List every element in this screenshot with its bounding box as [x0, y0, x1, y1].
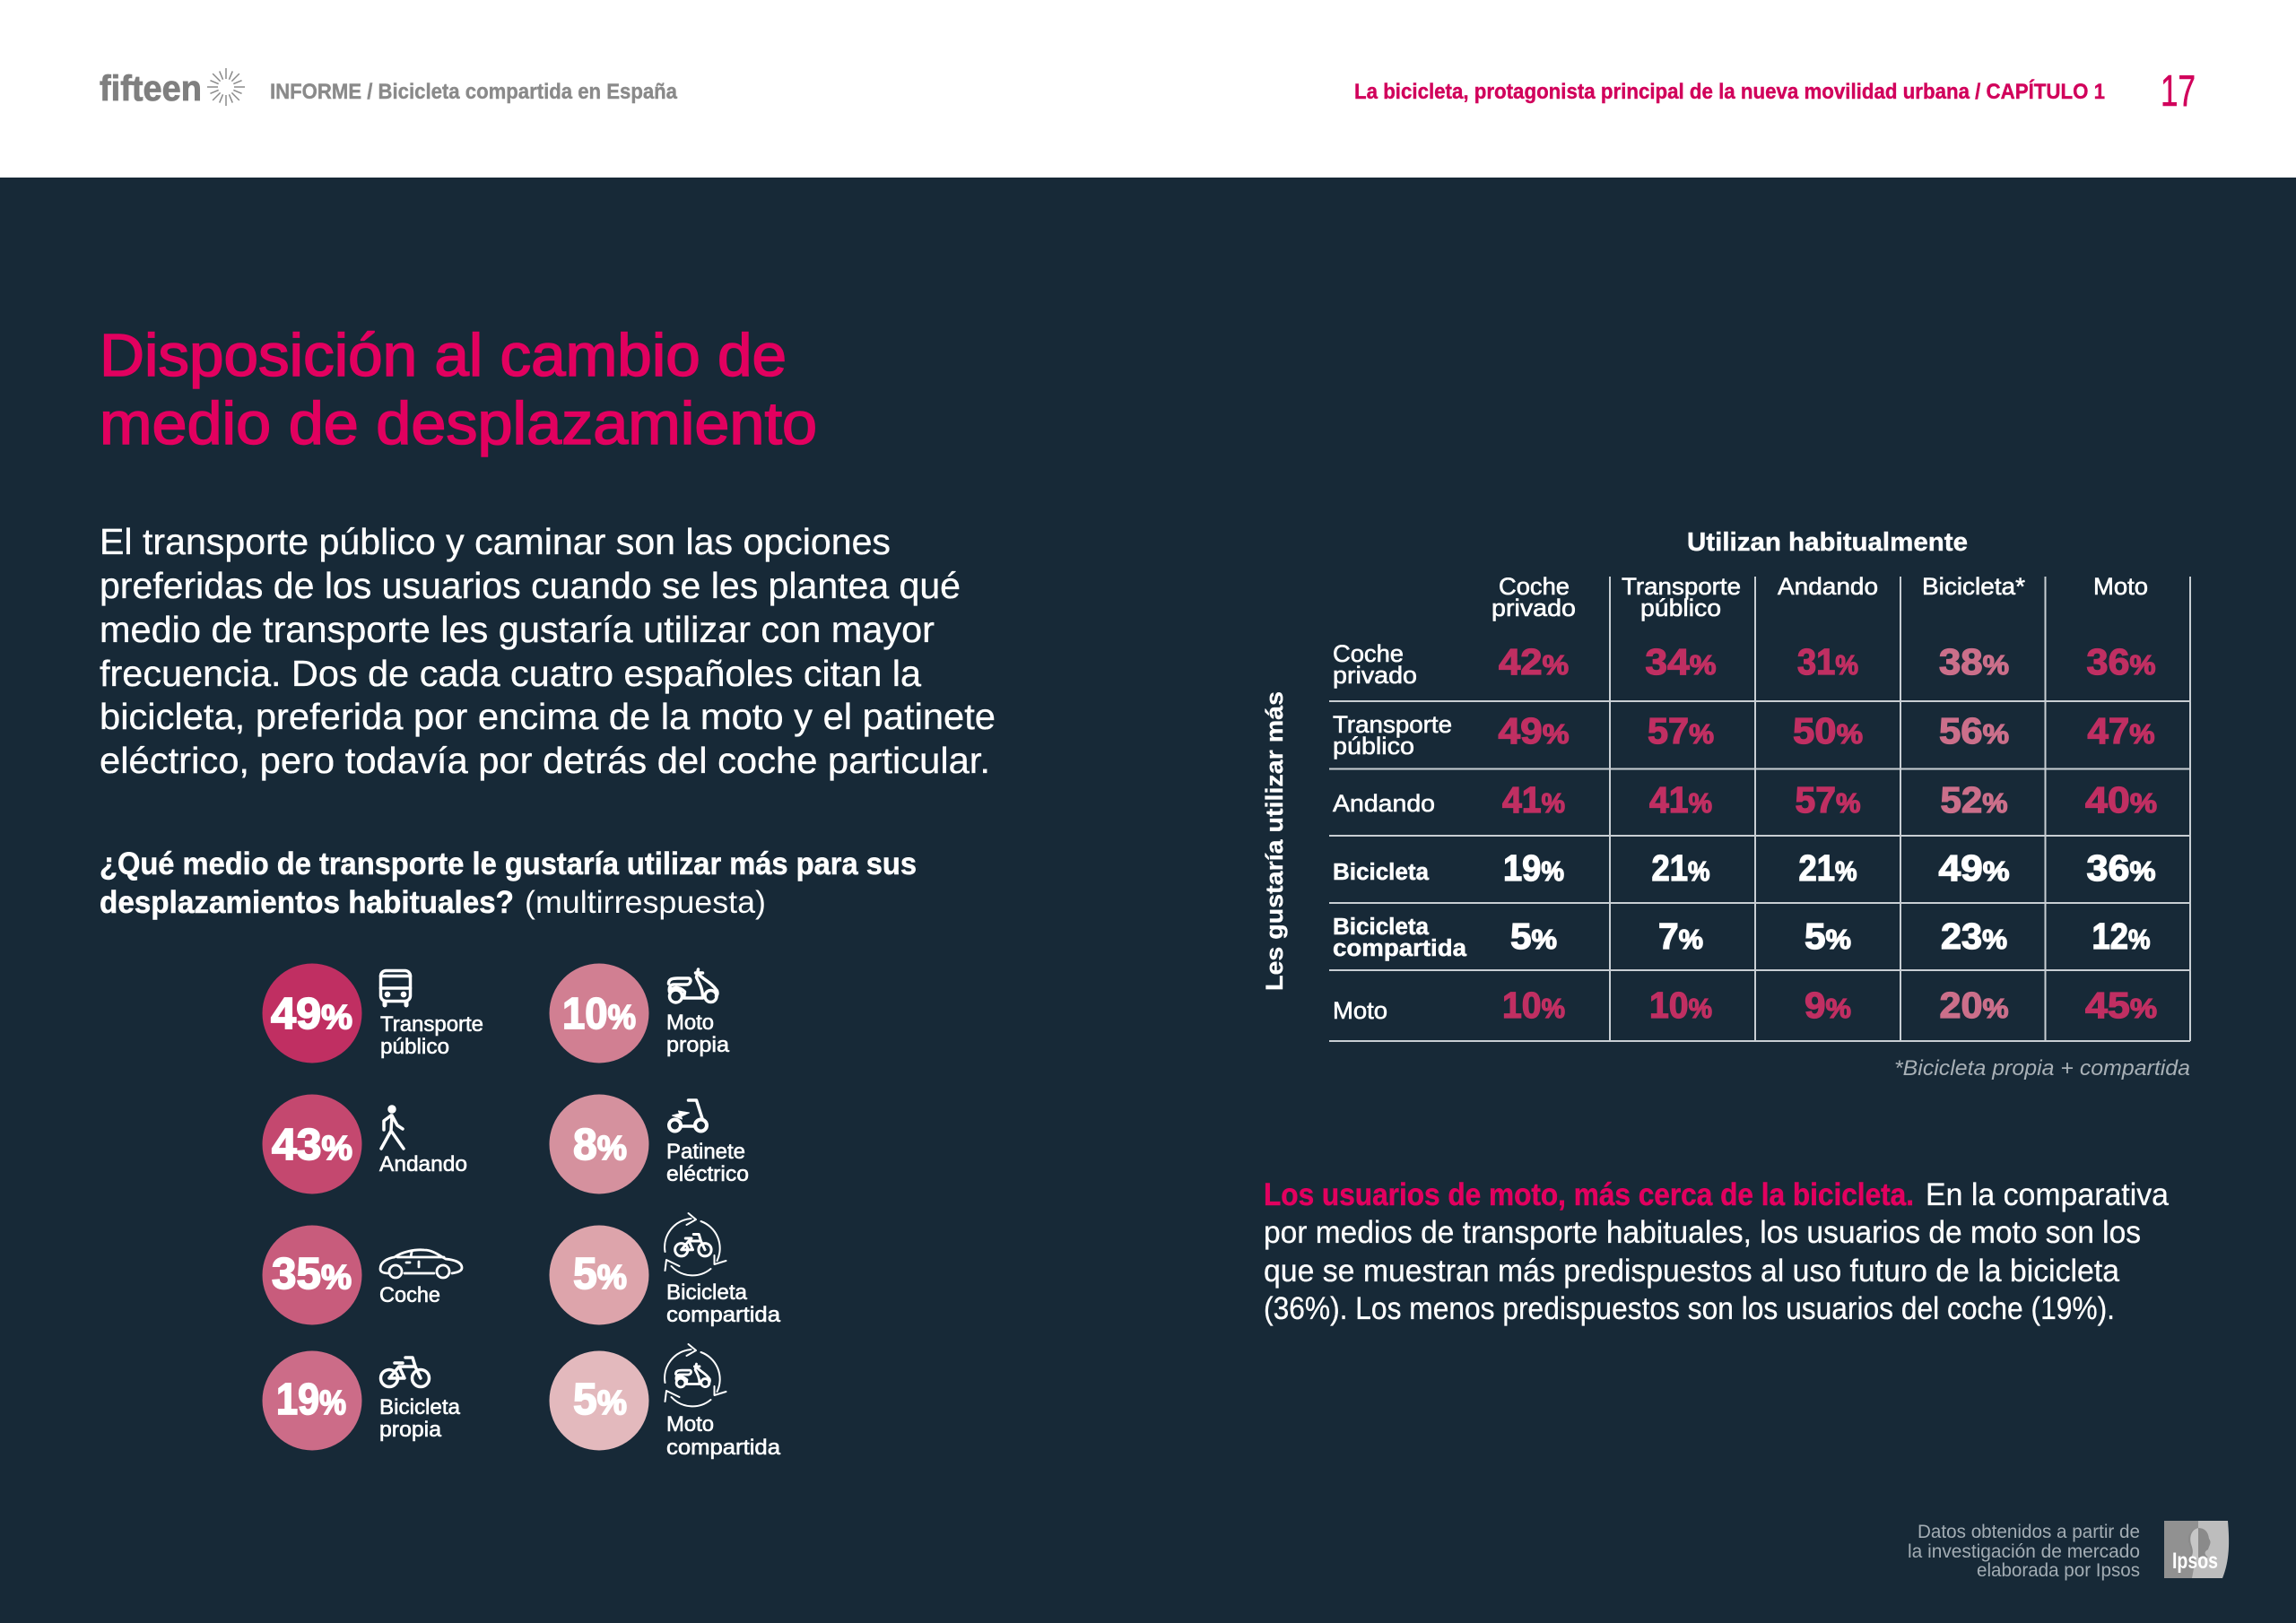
- row: andando: 52%: [1941, 779, 2007, 820]
- stat: bicicleta compartida 5%: compartida: [666, 1303, 781, 1327]
- stat: andando 43%: 43%: [272, 1121, 352, 1169]
- row: transporte público: 50%: [1793, 710, 1863, 751]
- page number: 17: [2161, 67, 2196, 116]
- stat: bicicleta propia 19%: propia: [379, 1418, 442, 1442]
- icon: electric scooter: [669, 1100, 707, 1132]
- stat: coche 35%: [262, 1225, 462, 1325]
- stat: bicicleta propia 19%: 19%: [276, 1376, 346, 1424]
- stat: bicicleta compartida 5%: 5%: [573, 1250, 627, 1298]
- row: coche privado: 34%: [1645, 641, 1717, 682]
- survey question: ¿Qué medio de transporte le gustaría utilizar más para sus: [100, 846, 917, 881]
- stat: moto compartida 5%: compartida: [666, 1436, 781, 1460]
- row: bicicleta: 36%: [2086, 847, 2156, 889]
- row: bicicleta: Bicicleta: [1333, 860, 1430, 885]
- column headers: Transporte: [1622, 573, 1741, 600]
- stat: moto propia 10%: [549, 963, 730, 1063]
- Ipsos logo: [2164, 1521, 2229, 1578]
- row: bicicleta compartida: 7%: [1658, 916, 1703, 957]
- column headers: público: [1640, 595, 1721, 621]
- stat: moto compartida 5%: Moto: [666, 1412, 714, 1436]
- row: bicicleta compartida: 12%: [2092, 916, 2151, 957]
- row: moto: 9%: [1805, 985, 1851, 1026]
- column headers: privado: [1492, 595, 1576, 621]
- row: transporte público: [1333, 710, 2154, 759]
- icon: motorbike: [669, 969, 718, 1002]
- stat: transporte público 49%: [262, 963, 483, 1063]
- source note: Datos obtenidos a partir de: [1918, 1522, 2140, 1542]
- row: bicicleta: 21%: [1652, 847, 1709, 889]
- intro paragraph: El transporte público y caminar son las opciones: [100, 521, 891, 562]
- intro paragraph: bicicleta, preferida por encima de la moto y el patinete: [100, 696, 996, 737]
- stat: moto propia 10%: Moto: [666, 1011, 714, 1035]
- icon: sun burst: [207, 68, 245, 106]
- icon: walking person: [381, 1107, 404, 1149]
- row: andando: 40%: [2085, 779, 2157, 820]
- survey question: [100, 846, 917, 920]
- stat: coche 35%: Coche: [379, 1283, 440, 1307]
- icon: bicycle: [380, 1358, 429, 1386]
- row: bicicleta compartida: compartida: [1333, 936, 1467, 961]
- fifteen logo: fifteen: [100, 69, 202, 108]
- column headers: Moto: [2093, 573, 2148, 600]
- stat: patinete eléctrico 8%: eléctrico: [666, 1162, 749, 1186]
- row: bicicleta compartida: 5%: [1805, 916, 1851, 957]
- column headers: [1492, 573, 2148, 621]
- row: transporte público: 56%: [1939, 710, 2009, 751]
- column headers: Coche: [1499, 573, 1570, 600]
- row: coche privado: 31%: [1797, 641, 1858, 682]
- stat: bicicleta propia 19%: [262, 1350, 461, 1451]
- highlight paragraph: En la comparativa: [1926, 1176, 2169, 1212]
- row: transporte público: 47%: [2088, 710, 2154, 751]
- stat: bicicleta propia 19%: Bicicleta: [379, 1395, 461, 1419]
- row: transporte público: 49%: [1498, 710, 1570, 751]
- vertical axis label: Les gustaría utilizar más: [1261, 691, 1288, 991]
- source note: la investigación de mercado: [1908, 1541, 2140, 1562]
- stat: moto compartida 5%: 5%: [573, 1376, 627, 1424]
- row: transporte público: 57%: [1648, 710, 1714, 751]
- stat: patinete eléctrico 8%: [549, 1094, 749, 1194]
- row: bicicleta compartida: 5%: [1510, 916, 1557, 957]
- stat: transporte público 49%: 49%: [271, 990, 352, 1038]
- intro paragraph: eléctrico, pero todavía por detrás del coche particular.: [100, 740, 990, 781]
- stat: transporte público 49%: público: [380, 1035, 449, 1059]
- title: Disposición al cambio de: [100, 322, 787, 389]
- row: bicicleta compartida: Bicicleta: [1333, 915, 1430, 940]
- row: bicicleta: 21%: [1799, 847, 1857, 889]
- row: andando: 41%: [1502, 779, 1565, 820]
- row: coche privado: 36%: [2086, 641, 2156, 682]
- row: bicicleta compartida: 23%: [1941, 916, 2007, 957]
- stat: andando 43%: [262, 1094, 467, 1194]
- stat: bicicleta compartida 5%: Bicicleta: [666, 1280, 748, 1305]
- header band: [0, 0, 2296, 178]
- highlight paragraph: [1264, 1176, 2169, 1326]
- highlight paragraph: Los usuarios de moto, más cerca de la bicicleta.: [1264, 1177, 1914, 1212]
- table heading: Utilizan habitualmente: [1687, 528, 1968, 557]
- icon: shared bicycle: [665, 1213, 726, 1275]
- stat: bicicleta compartida 5%: [549, 1213, 781, 1327]
- row: andando: 41%: [1649, 779, 1712, 820]
- row: coche privado: 42%: [1499, 641, 1569, 682]
- row: transporte público: público: [1333, 733, 1414, 759]
- icon: bus: [380, 970, 411, 1005]
- row: moto: Moto: [1333, 997, 1387, 1024]
- stat: moto propia 10%: 10%: [562, 990, 636, 1038]
- stat: moto propia 10%: propia: [666, 1033, 730, 1057]
- icon: car: [380, 1250, 462, 1278]
- stat: andando 43%: Andando: [379, 1152, 467, 1176]
- row: moto: 45%: [2085, 985, 2157, 1026]
- intro paragraph: frecuencia. Dos de cada cuatro españoles citan la: [100, 653, 921, 694]
- highlight paragraph: por medios de transporte habituales, los usuarios de moto son los: [1264, 1214, 2141, 1250]
- row: andando: Andando: [1333, 790, 1435, 817]
- stat: patinete eléctrico 8%: Patinete: [666, 1140, 745, 1164]
- table footnote: *Bicicleta propia + compartida: [1894, 1056, 2190, 1081]
- row: moto: 10%: [1649, 985, 1712, 1026]
- table: usage cross-tab: [1261, 528, 2190, 1081]
- row: bicicleta: 19%: [1503, 847, 1564, 889]
- row: coche privado: Coche: [1333, 640, 1404, 667]
- row: coche privado: [1333, 640, 2156, 689]
- column headers: Bicicleta*: [1922, 573, 2025, 600]
- stat: patinete eléctrico 8%: 8%: [573, 1121, 627, 1169]
- Ipsos logo: Ipsos: [2172, 1549, 2218, 1574]
- intro paragraph: preferidas de los usuarios cuando se les plantea qué: [100, 565, 961, 606]
- row: coche privado: 38%: [1939, 641, 2009, 682]
- row: moto: 10%: [1502, 985, 1565, 1026]
- source note: elaborada por Ipsos: [1977, 1560, 2140, 1581]
- row: moto: 20%: [1939, 985, 2009, 1026]
- icon: shared motorbike: [665, 1344, 726, 1406]
- row: moto: [1333, 985, 2157, 1026]
- row: bicicleta: [1333, 847, 2156, 889]
- stat: transporte público 49%: Transporte: [380, 1012, 483, 1037]
- survey question: (multirrespuesta): [525, 885, 766, 920]
- highlight paragraph: (36%). Los menos predispuestos son los usuarios del coche (19%).: [1264, 1290, 2115, 1326]
- row: bicicleta: 49%: [1939, 847, 2009, 889]
- row: andando: 57%: [1796, 779, 1860, 820]
- report name: INFORME / Bicicleta compartida en España: [270, 80, 677, 104]
- survey question: desplazamientos habituales?: [100, 885, 514, 920]
- source note: [1908, 1522, 2140, 1581]
- row: bicicleta compartida: [1333, 915, 2151, 961]
- column headers: Andando: [1778, 573, 1878, 600]
- title: medio de desplazamiento: [100, 390, 817, 457]
- intro paragraph: medio de transporte les gustaría utilizar con mayor: [100, 609, 935, 650]
- intro paragraph: [100, 521, 996, 781]
- row: andando: [1333, 779, 2157, 820]
- chapter title: La bicicleta, protagonista principal de la nueva movilidad urbana / CAPÍTULO 1: [1354, 79, 2105, 104]
- row: coche privado: privado: [1333, 662, 1417, 689]
- stat: moto compartida 5%: [549, 1344, 781, 1460]
- title: [100, 322, 817, 457]
- row: transporte público: Transporte: [1333, 711, 1452, 738]
- stat: coche 35%: 35%: [272, 1250, 352, 1298]
- highlight paragraph: que se muestran más predispuestos al uso futuro de la bicicleta: [1264, 1253, 2119, 1289]
